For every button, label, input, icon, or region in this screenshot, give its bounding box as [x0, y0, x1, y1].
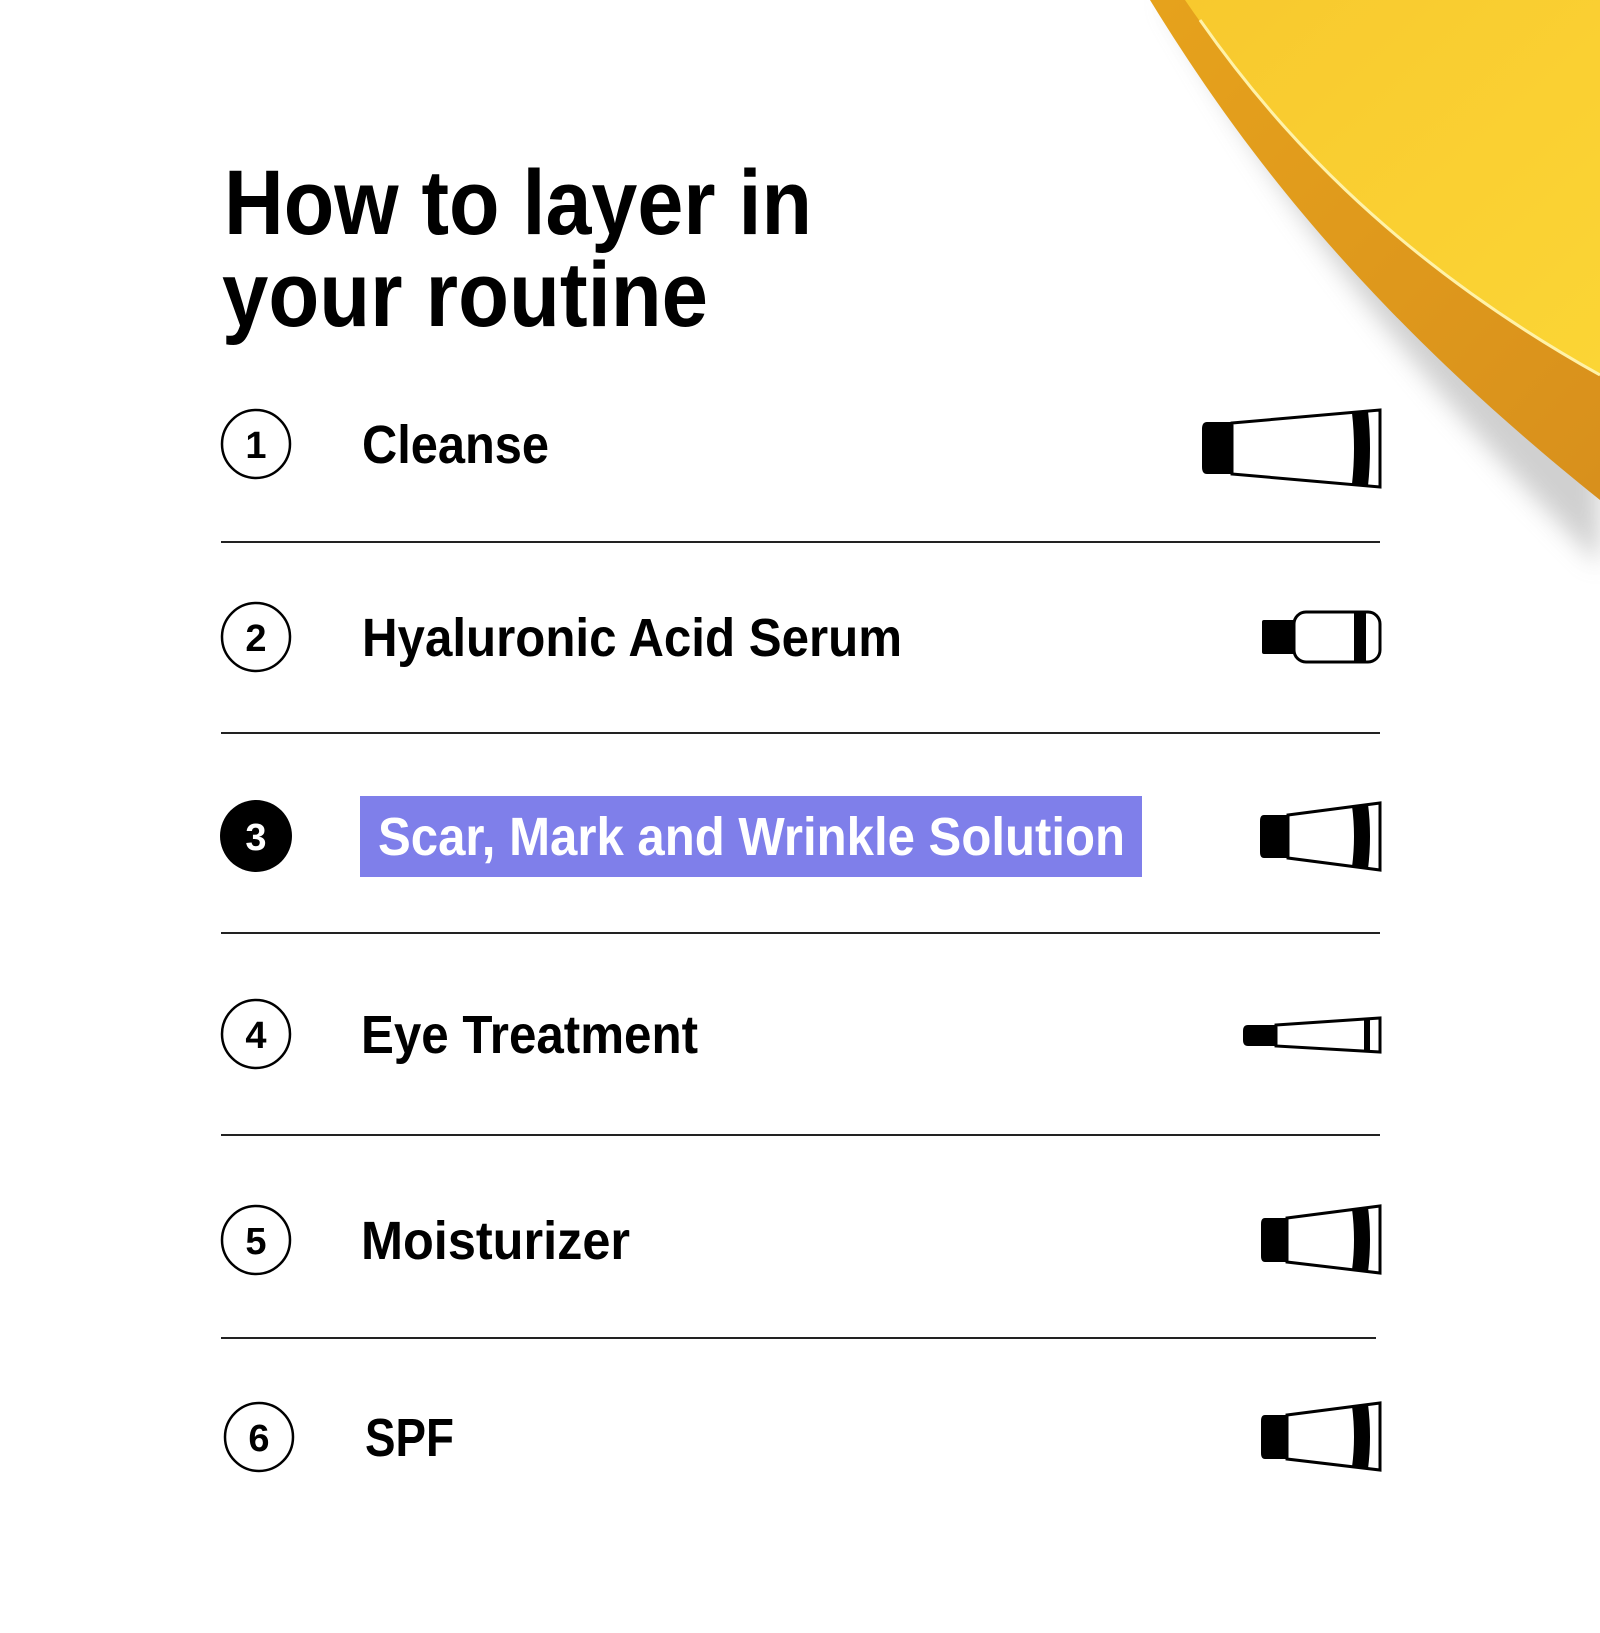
step 3: highlighted Scar, Mark and Wrinkle Solution: Scar, Mark and Wrinkle Solution — [378, 807, 1125, 867]
step 1: Cleanse — [222, 410, 1380, 487]
step 6: SPF — [225, 1403, 1380, 1471]
icon: tube — [1260, 803, 1380, 870]
step 5: Moisturizer: 5 — [245, 1221, 267, 1263]
icon: tube — [1261, 1403, 1380, 1470]
icon: small bottle — [1262, 612, 1380, 662]
step 3: highlighted Scar, Mark and Wrinkle Solution: 3 — [245, 817, 267, 859]
step 4: Eye Treatment: 4 — [245, 1015, 267, 1057]
step 4: Eye Treatment: Eye Treatment — [361, 1005, 698, 1065]
title: How to layer in — [224, 152, 812, 254]
step 2: Hyaluronic Acid Serum — [222, 603, 1380, 671]
step 1: Cleanse: 1 — [245, 425, 267, 467]
icon: tube — [1202, 410, 1380, 487]
title: your routine — [222, 244, 708, 346]
icon: thin tube — [1243, 1018, 1380, 1052]
step 5: Moisturizer: Moisturizer — [361, 1211, 630, 1271]
step 2: Hyaluronic Acid Serum: Hyaluronic Acid Serum — [362, 608, 902, 668]
step 6: SPF: SPF — [365, 1408, 454, 1468]
step 5: Moisturizer — [222, 1206, 1380, 1274]
yellow blob decoration — [1150, 0, 1600, 565]
step 6: SPF: 6 — [248, 1418, 270, 1460]
title — [222, 152, 812, 346]
step 3: highlighted Scar, Mark and Wrinkle Solution — [220, 796, 1380, 877]
step 2: Hyaluronic Acid Serum: 2 — [245, 618, 267, 660]
icon: tube — [1261, 1206, 1380, 1273]
step 1: Cleanse: Cleanse — [362, 415, 549, 475]
step 4: Eye Treatment — [222, 1000, 1380, 1068]
